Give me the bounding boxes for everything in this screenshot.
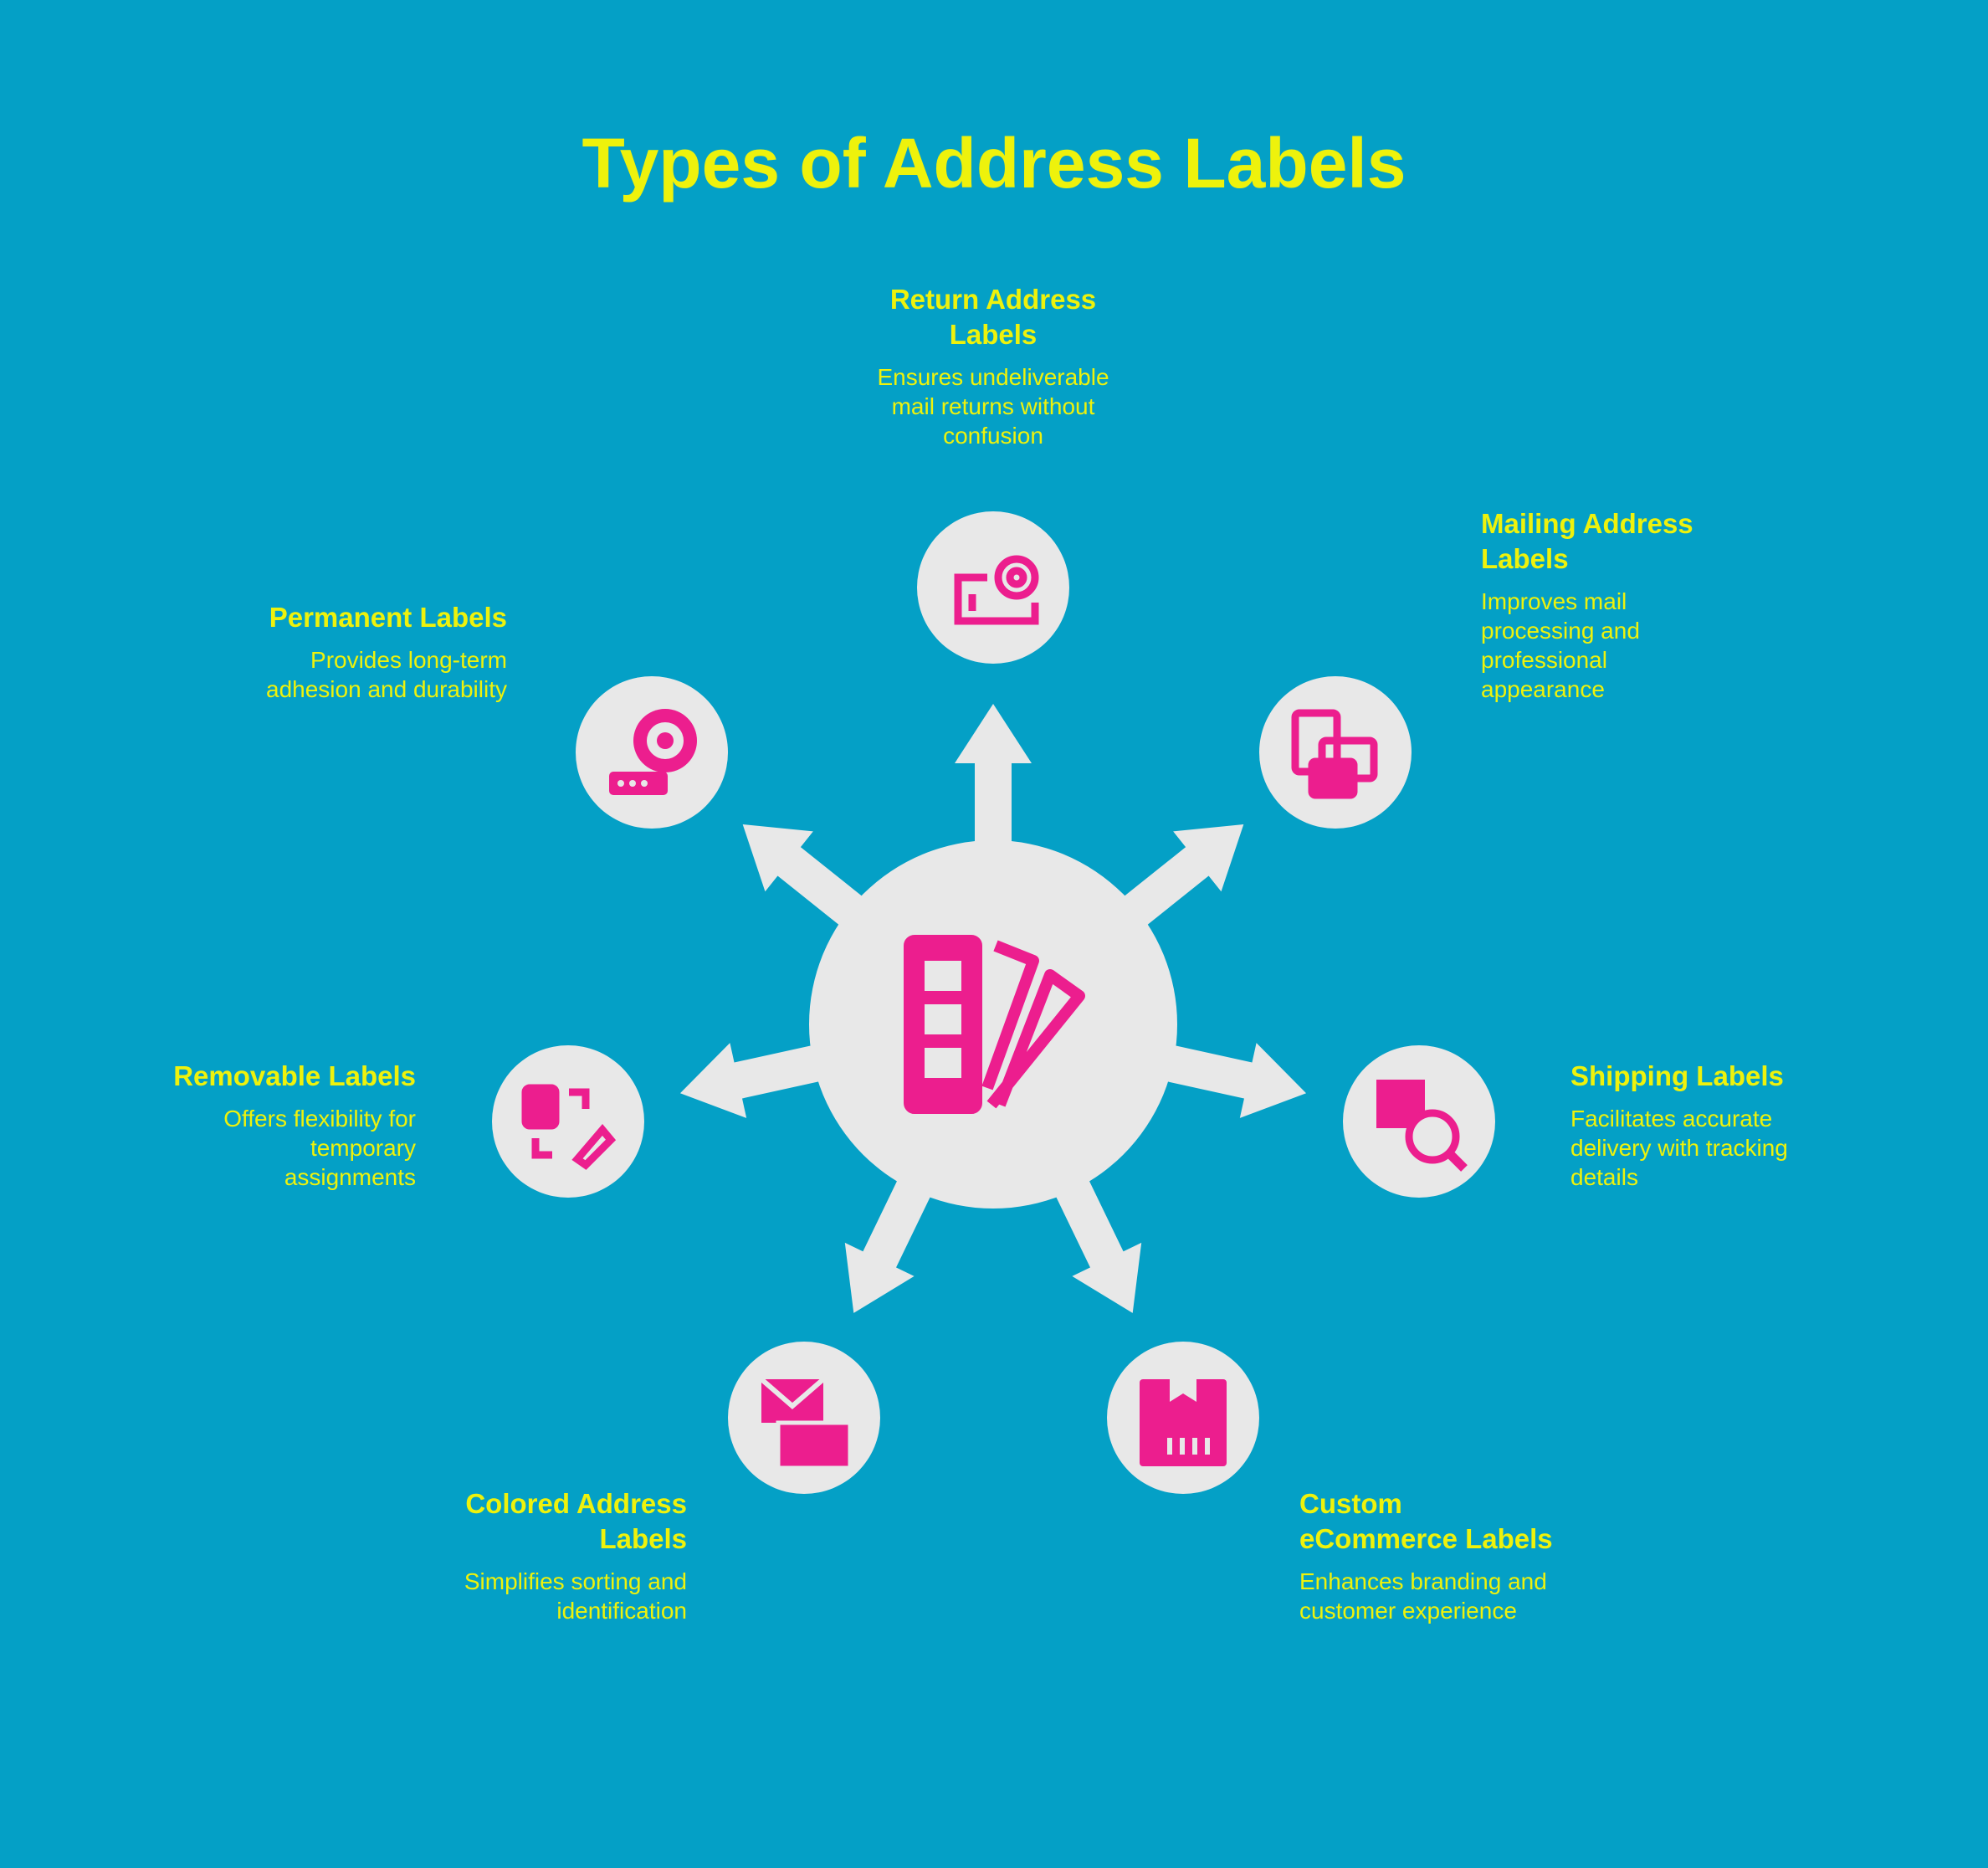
text: mailing: Mailing Address [1481,508,1693,539]
text: colored: identification [556,1598,687,1624]
text: permanent: Permanent Labels [269,602,507,633]
text: custom: Custom [1299,1488,1402,1519]
text: return address: Ensures undeliverable [877,364,1109,390]
text: removable [173,1060,416,1190]
text: shipping: delivery with tracking [1570,1135,1788,1161]
text: return address: Labels [950,319,1037,350]
text: colored: Colored Address [465,1488,687,1519]
title: Types of Address Labels [582,124,1406,203]
text: custom: eCommerce Labels [1299,1523,1553,1554]
icon: removable [525,1088,611,1165]
text: custom: Enhances branding and [1299,1568,1547,1594]
text: mailing: professional [1481,647,1607,673]
text: return address: mail returns without [892,393,1094,419]
text: permanent: Provides long-term [310,647,507,673]
icon: return address @ [958,559,1035,621]
text: removable: Removable Labels [173,1060,416,1091]
text: removable: assignments [284,1164,416,1190]
text: mailing: Improves mail [1481,588,1627,614]
text: shipping: Facilitates accurate [1570,1106,1772,1132]
text: custom: customer experience [1299,1598,1517,1624]
icon: swatch fan [909,941,1079,1108]
text: colored: Simplifies sorting and [464,1568,687,1594]
text: colored: Labels [599,1523,687,1554]
text: removable: Offers flexibility for [223,1106,416,1132]
arrows [672,704,1314,1330]
icon: shipping search [1376,1080,1464,1168]
text: return address: Return Address [890,284,1096,315]
text: shipping [1570,1060,1788,1190]
text: permanent: adhesion and durability [266,676,507,702]
text: removable: temporary [310,1135,416,1161]
text: return address: confusion [943,423,1043,449]
text: custom [1299,1488,1553,1624]
text: colored [464,1488,687,1624]
text: mailing: processing and [1481,618,1640,644]
icon: tape roll [609,709,697,795]
text: permanent [266,602,507,702]
icon: envelopes [761,1379,850,1468]
text: mailing: appearance [1481,676,1605,702]
text: return address [877,284,1109,449]
node circles [492,511,1495,1494]
text: mailing [1481,508,1693,702]
text: shipping: details [1570,1164,1638,1190]
text: mailing: Labels [1481,543,1569,574]
center hub [809,840,1177,1209]
text: shipping: Shipping Labels [1570,1060,1784,1091]
icon: ecommerce box [1140,1379,1227,1466]
icon: mailing [1295,713,1374,795]
